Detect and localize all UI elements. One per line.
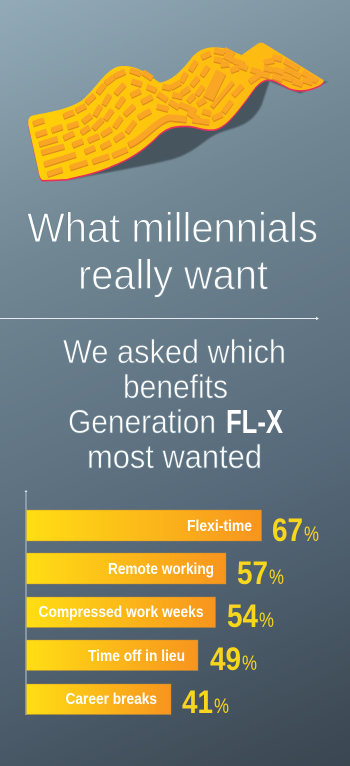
title: What millennials xyxy=(27,204,318,251)
keys xyxy=(36,51,315,173)
bar: Flexi-time 67%: Flexi-time xyxy=(187,518,252,535)
icon: wavy keyboard xyxy=(28,43,328,182)
keyboard edge xyxy=(28,44,324,182)
chart axis xyxy=(24,490,28,715)
bar: Time off in lieu 49% xyxy=(26,640,257,677)
subtitle xyxy=(63,333,286,475)
bar: Compressed work weeks 54%: Compressed work weeks xyxy=(38,604,204,621)
bar: Flexi-time 67%: 67 xyxy=(272,512,303,548)
bar: Compressed work weeks 54%: 54 xyxy=(227,598,258,634)
keyboard body xyxy=(28,43,324,180)
bar: Career breaks 41% xyxy=(26,684,229,720)
subtitle: most wanted xyxy=(87,438,262,475)
bar: Remote working 57%: 57 xyxy=(237,555,268,591)
arrow divider xyxy=(0,317,319,320)
title: really want xyxy=(78,251,268,298)
bar: Remote working 57%: Remote working xyxy=(108,561,214,578)
keyboard shadow xyxy=(68,80,328,180)
title xyxy=(27,204,318,298)
bar: Time off in lieu 49%: Time off in lieu xyxy=(88,648,185,665)
bar: Career breaks 41%: % xyxy=(214,695,229,718)
bar: Flexi-time 67%: % xyxy=(304,523,319,546)
bar: Compressed work weeks 54% xyxy=(26,597,274,634)
bar: Remote working 57%: % xyxy=(269,566,284,589)
bar: Time off in lieu 49%: % xyxy=(242,652,257,675)
bar: Career breaks 41%: Career breaks xyxy=(66,691,157,708)
keys shadow xyxy=(36,52,315,175)
subtitle: Generation xyxy=(68,403,216,440)
bar chart xyxy=(24,490,319,720)
bar: Time off in lieu 49%: 49 xyxy=(210,641,241,677)
subtitle: FL-X xyxy=(226,403,283,440)
subtitle: We asked which xyxy=(63,333,286,370)
subtitle: benefits xyxy=(123,368,228,405)
bar: Career breaks 41%: 41 xyxy=(182,684,213,720)
bar: Flexi-time 67% xyxy=(26,510,319,548)
bar: Compressed work weeks 54%: % xyxy=(259,609,274,632)
bar: Remote working 57% xyxy=(26,553,284,591)
